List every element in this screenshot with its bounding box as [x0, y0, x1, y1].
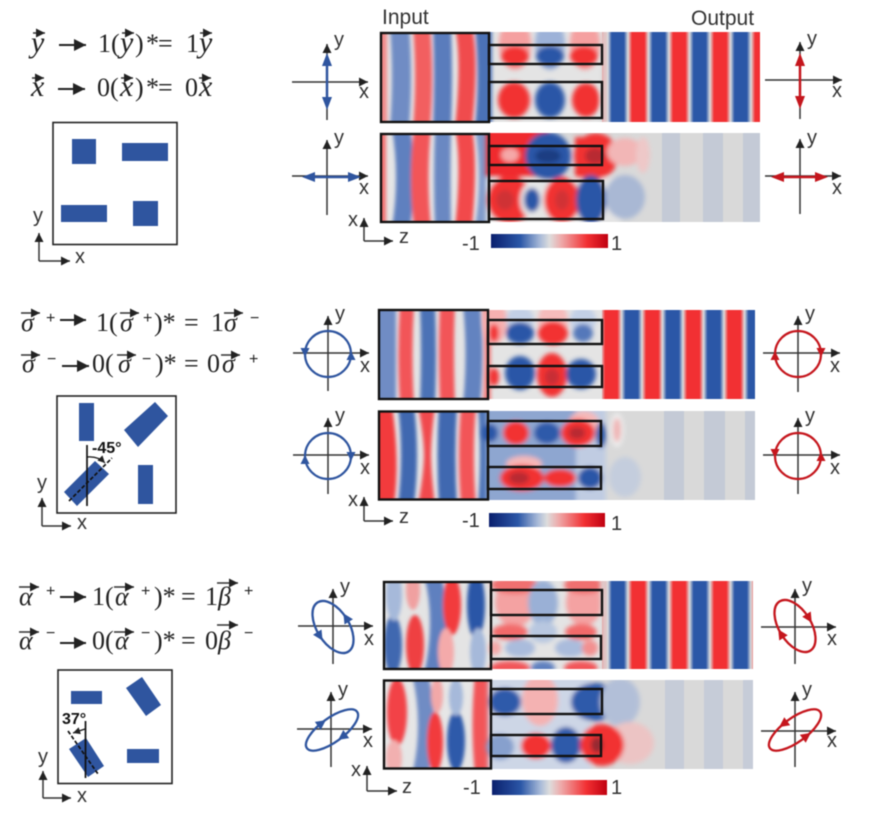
input polarization: alpha minus: x	[363, 730, 373, 752]
xy axes: linear cell: y	[33, 205, 43, 227]
equations: elliptical: β	[217, 582, 231, 611]
device outlines: x input	[381, 134, 603, 222]
input polarization: circular plus	[293, 303, 370, 391]
equations: linear: x	[119, 70, 134, 103]
equations: linear: y	[117, 26, 134, 59]
equations: elliptical: +	[46, 583, 55, 600]
xy axes: elliptical cell: y	[38, 746, 48, 768]
xy axes: linear cell	[33, 205, 85, 268]
output polarization: y: x	[832, 80, 842, 102]
input polarization: alpha plus: x	[364, 628, 374, 650]
output polarization: y: y	[807, 28, 817, 50]
equations: elliptical: α	[115, 582, 130, 611]
equations: linear: x	[30, 70, 45, 103]
metasurface unit cell: linear	[53, 122, 177, 244]
equations: linear: =	[158, 29, 173, 58]
input polarization: alpha minus	[297, 679, 373, 767]
xz axes: x	[348, 209, 358, 231]
field map: circular minus blocked	[379, 410, 756, 501]
field map: alpha plus transmits	[384, 580, 754, 670]
equations: circular: σ	[22, 349, 36, 378]
equations: elliptical: −	[46, 625, 55, 642]
equations: circular: +	[46, 310, 55, 327]
equations: circular: 0(	[92, 349, 114, 378]
equations: circular	[21, 308, 259, 378]
input polarization: x: y	[334, 127, 344, 149]
equations: circular: =	[184, 349, 199, 378]
output polarization: circular plus: x	[830, 457, 840, 479]
device outlines: circular minus	[379, 412, 601, 500]
colorbar	[462, 510, 622, 535]
output polarization: beta plus: x	[827, 628, 837, 650]
xy axes: elliptical cell: x	[77, 785, 87, 807]
equations: circular: +	[143, 310, 152, 327]
output polarization: beta minus: y	[802, 679, 812, 701]
equations: elliptical: 0(	[92, 626, 114, 655]
device outlines: y input	[381, 33, 602, 122]
equations: elliptical: +	[244, 583, 253, 600]
section: linear polarization	[28, 6, 842, 268]
output polarization: beta plus: y	[802, 575, 812, 597]
input polarization: x: x	[359, 177, 369, 199]
output polarization: circular minus: y	[805, 303, 815, 325]
equations: elliptical: α	[19, 582, 34, 611]
input polarization: circular plus: x	[360, 355, 370, 377]
xy axes: elliptical cell	[38, 746, 87, 807]
xz axes: x	[351, 759, 361, 781]
input polarization: alpha plus: y	[340, 576, 350, 598]
equations: circular: −	[142, 351, 151, 368]
equations: circular: 0	[207, 349, 220, 378]
xy axes: linear cell: x	[75, 246, 85, 268]
colorbar	[462, 233, 622, 255]
equations: circular: σ	[222, 349, 236, 378]
equations: circular: σ	[224, 308, 238, 337]
colorbar: 1	[611, 233, 622, 255]
equations: linear: )	[135, 29, 144, 58]
output polarization: x	[765, 127, 842, 214]
output polarization: beta minus: x	[827, 730, 837, 752]
equations: circular: =	[184, 308, 199, 337]
equations: elliptical: α	[19, 626, 34, 655]
equations: linear: 1	[186, 29, 199, 58]
equations: circular: +	[249, 351, 258, 368]
equations: circular: −	[250, 310, 259, 327]
equations: elliptical: 1	[205, 582, 218, 611]
output polarization: y	[765, 28, 842, 119]
field map: circular plus transmits	[380, 309, 756, 400]
xz axes: z	[402, 776, 412, 798]
equations: elliptical: =	[181, 582, 196, 611]
field map: y input transmits	[382, 31, 761, 123]
input polarization: alpha minus: y	[338, 679, 348, 701]
metasurface unit cell: circular	[57, 396, 176, 513]
xy axes: circular cell: y	[37, 472, 47, 494]
input polarization: circular plus: y	[335, 303, 345, 325]
equations: circular: σ	[120, 308, 134, 337]
equations: circular: σ	[118, 349, 132, 378]
equations: linear: y	[28, 26, 45, 59]
equations: elliptical: β	[217, 626, 231, 655]
colorbar: 1	[611, 777, 622, 799]
device outlines: alpha minus	[384, 680, 602, 768]
label: Input: Input	[382, 6, 429, 29]
equations: elliptical: −	[244, 625, 253, 642]
input polarization: y: x	[359, 81, 369, 103]
output polarization: circular plus	[763, 405, 840, 494]
output polarization: circular plus: y	[805, 405, 815, 427]
equations: linear: *	[146, 73, 159, 102]
output polarization: circular minus	[763, 303, 840, 392]
equations: linear: 1(	[98, 29, 120, 58]
input polarization: x	[292, 127, 369, 215]
field map: x input blocked	[382, 132, 760, 223]
equations: circular: )*	[154, 308, 176, 337]
xz axes: z	[399, 506, 409, 528]
colorbar: 1	[611, 513, 622, 535]
output polarization: x: y	[807, 127, 817, 149]
output polarization: circular minus: x	[830, 355, 840, 377]
xz axes: z	[399, 226, 409, 248]
equations: elliptical: −	[141, 625, 150, 642]
equations: elliptical	[19, 582, 253, 655]
equations: linear: =	[158, 73, 173, 102]
equations: elliptical: +	[141, 583, 150, 600]
equations: circular: σ	[21, 308, 35, 337]
metasurface unit cell: elliptical	[58, 670, 172, 784]
equations: linear: )	[135, 73, 144, 102]
xy axes: circular cell: x	[77, 512, 87, 534]
equations: linear: 0(	[97, 73, 119, 102]
output polarization: beta plus	[761, 575, 837, 664]
input polarization: circular minus: y	[335, 405, 345, 427]
section: elliptical polarization	[19, 569, 837, 807]
device outlines: circular plus	[379, 310, 602, 399]
xy axes: circular cell	[37, 472, 87, 534]
input polarization: alpha plus	[298, 576, 374, 664]
colorbar	[463, 777, 622, 799]
equations: linear	[28, 26, 213, 103]
section: circular polarization	[21, 300, 840, 535]
equations: linear: x	[198, 70, 213, 103]
colorbar: -1	[463, 777, 481, 799]
input polarization: circular minus: x	[360, 457, 370, 479]
equations: elliptical: 0	[205, 626, 218, 655]
output polarization: x: x	[832, 177, 842, 199]
input polarization: y: y	[334, 29, 344, 51]
input polarization: y	[292, 29, 369, 120]
colorbar: -1	[462, 233, 480, 255]
equations: linear: 0	[185, 73, 198, 102]
equations: linear: *	[146, 29, 159, 58]
field map: alpha minus blocked	[384, 680, 754, 770]
equations: elliptical: 1(	[92, 582, 114, 611]
xz axes	[351, 759, 412, 798]
colorbar: -1	[462, 510, 480, 532]
device outlines: alpha plus	[384, 582, 602, 669]
equations: circular: )*	[155, 349, 177, 378]
input polarization: circular minus	[293, 405, 370, 494]
equations: circular: 1	[211, 308, 224, 337]
xz axes	[348, 209, 409, 248]
equations: linear: y	[196, 26, 213, 59]
label: Output: Output	[691, 7, 754, 30]
xz axes	[348, 489, 409, 528]
equations: elliptical: α	[115, 626, 130, 655]
xz axes: x	[348, 489, 358, 511]
output polarization: beta minus	[761, 679, 837, 767]
metasurface unit cell: elliptical: 37°	[62, 711, 86, 728]
equations: elliptical: )*	[154, 626, 176, 655]
equations: elliptical: =	[181, 626, 196, 655]
equations: elliptical: )*	[154, 582, 176, 611]
equations: circular: 1(	[96, 308, 118, 337]
metasurface unit cell: circular: -45°	[92, 440, 122, 457]
equations: circular: −	[47, 351, 56, 368]
